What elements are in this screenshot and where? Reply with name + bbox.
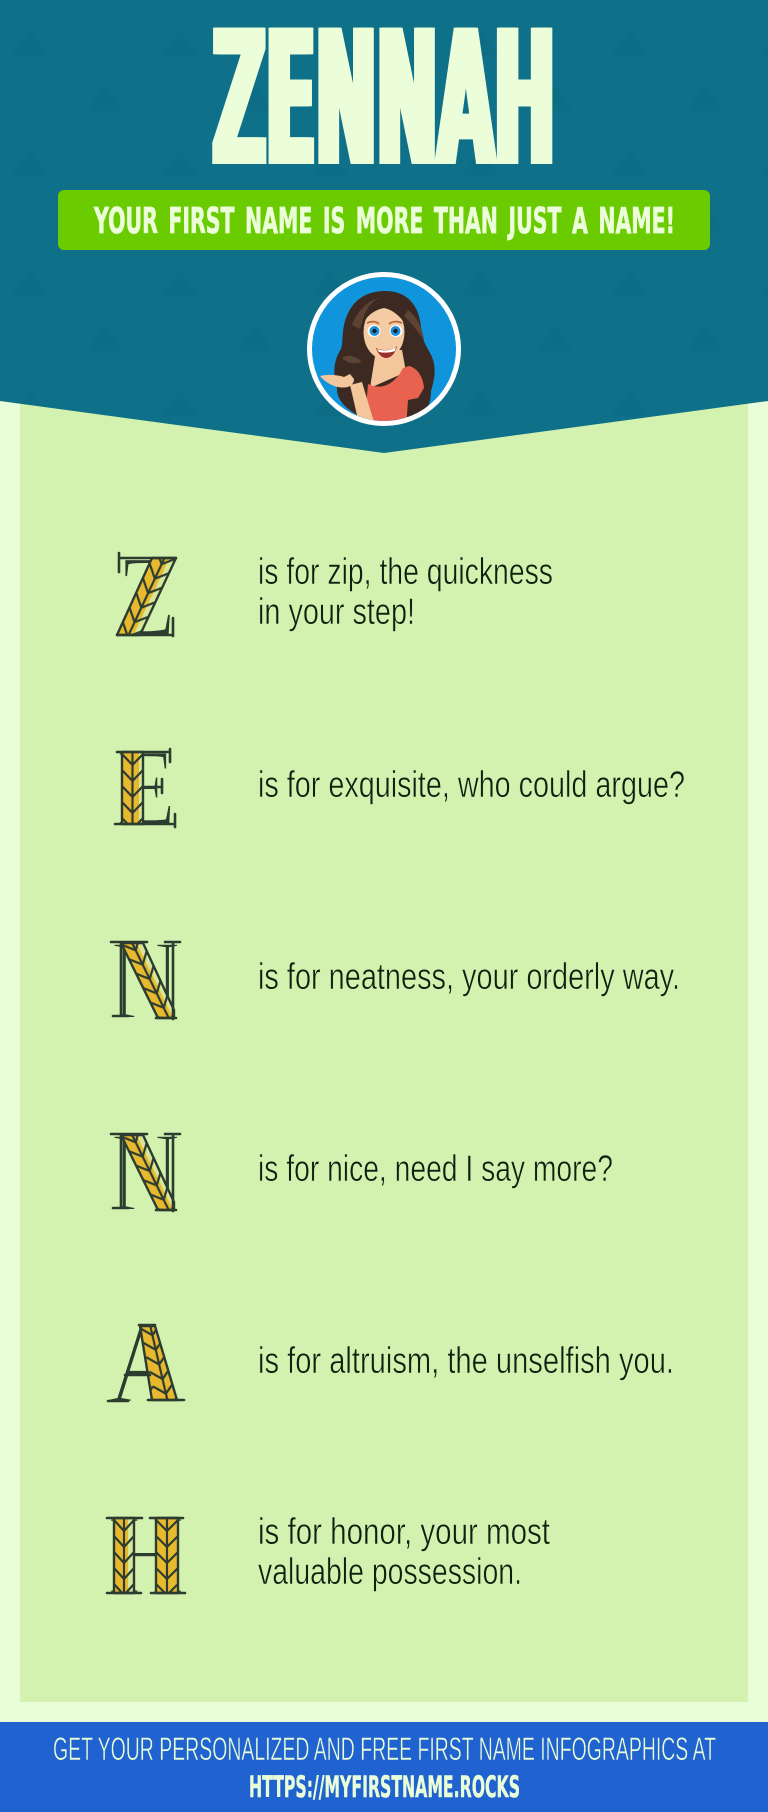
text: H meaning: valuable possession. <box>258 1551 522 1592</box>
icon: wheat letter N: N <box>111 918 180 1043</box>
text: H meaning: is for honor, your most <box>258 1511 551 1552</box>
icon: wheat letter A: A <box>108 1297 184 1428</box>
row: E <box>115 727 685 848</box>
icon: wheat letter H: H <box>107 1493 185 1618</box>
footer text: website: HTTPS://MYFIRSTNAME.ROCKS <box>249 1770 520 1804</box>
icon: avatar of smiling woman in circle <box>310 274 458 430</box>
header: teal chevron background <box>0 0 768 453</box>
footer <box>0 1722 768 1812</box>
text: second N meaning: is for nice, need I say more? <box>258 1148 613 1189</box>
row: Z <box>117 533 553 661</box>
panel: letters background <box>20 395 748 1702</box>
row: A <box>108 1297 674 1428</box>
icon: wheat letter N: N <box>111 1110 180 1235</box>
text: Z meaning <box>258 551 553 632</box>
text: H meaning <box>258 1511 551 1592</box>
text: Z meaning: is for zip, the quickness <box>258 551 553 592</box>
icon: wheat letter E: E <box>116 727 176 848</box>
banner: tagline <box>58 190 710 250</box>
icon: wheat letter Z: Z <box>117 533 176 661</box>
text: Z meaning: in your step! <box>258 591 415 632</box>
row: H <box>107 1493 551 1618</box>
row: N <box>111 918 680 1043</box>
row: second N <box>111 1110 613 1235</box>
